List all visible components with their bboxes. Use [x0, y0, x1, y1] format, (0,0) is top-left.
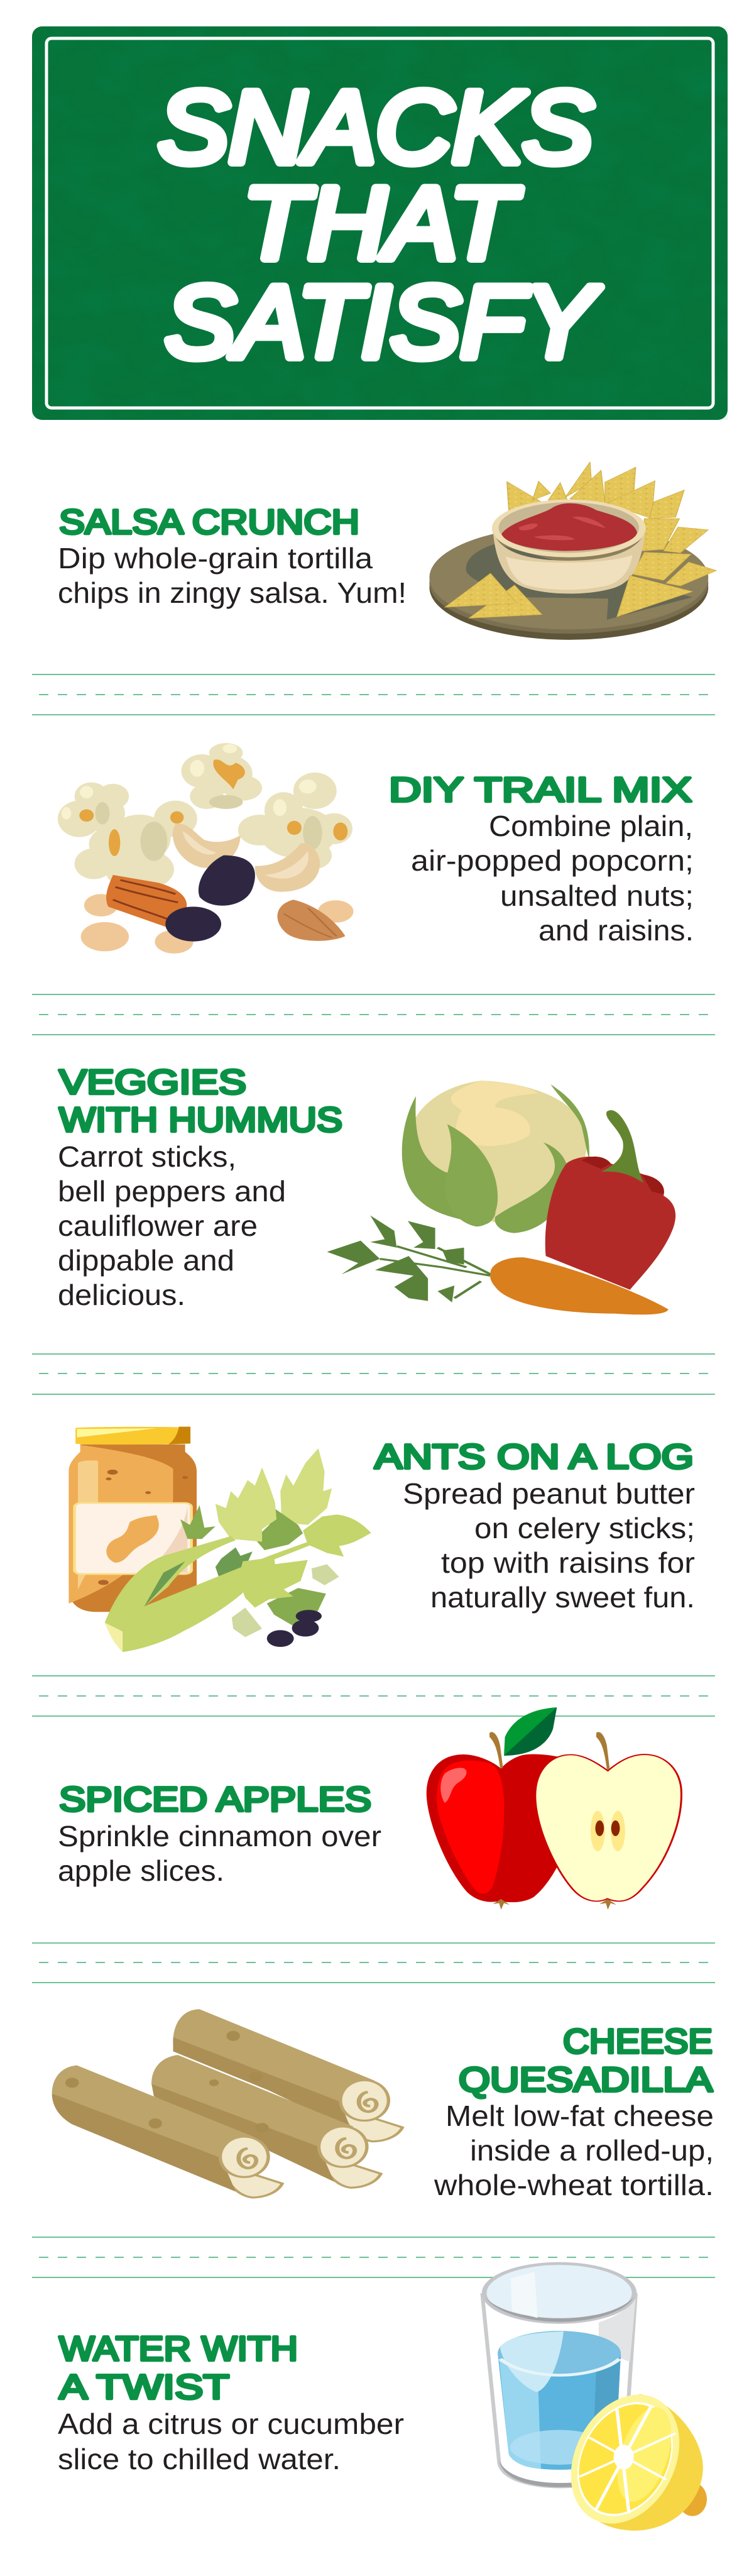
text: veggies description: delicious.	[58, 1279, 185, 1311]
text: spiced apples description	[58, 1820, 381, 1887]
text: ants on a log description	[403, 1477, 695, 1614]
text: ants on a log description: Spread peanut butter	[403, 1477, 695, 1510]
panel: spiced apples	[58, 1707, 681, 1910]
heading: veggies with hummus: VEGGIES	[59, 1062, 246, 1101]
text: salsa crunch description: chips in zingy salsa. Yum!	[58, 576, 407, 609]
text: veggies description: Carrot sticks,	[58, 1140, 236, 1173]
panel: salsa crunch	[58, 462, 716, 640]
text: trail mix description	[411, 810, 694, 947]
heading: cheese quesadilla: QUESADILLA	[459, 2060, 713, 2099]
text: water description	[58, 2408, 404, 2475]
icon: chips and salsa	[429, 462, 716, 640]
text: trail mix description: Combine plain,	[489, 810, 693, 842]
panel: veggies with hummus	[58, 1062, 675, 1314]
heading: cheese quesadilla	[459, 2022, 713, 2099]
panel: diy trail mix	[58, 743, 694, 954]
title	[158, 70, 601, 379]
panel: ants on a log	[68, 1427, 695, 1652]
heading: water with a twist	[59, 2329, 298, 2406]
text: salsa crunch description	[58, 542, 407, 609]
text: trail mix description: air-popped popcorn;	[411, 844, 694, 877]
heading: salsa crunch: SALSA CRUNCH	[59, 502, 359, 541]
text: quesadilla description	[434, 2100, 714, 2201]
heading: veggies with hummus	[59, 1062, 342, 1139]
title: SNACKS	[158, 70, 593, 184]
panel: cheese quesadilla	[52, 2009, 714, 2201]
icon: popcorn, nuts and raisins	[58, 743, 353, 954]
icon: rolled tortillas	[52, 2009, 403, 2198]
text: water description: Add a citrus or cucumber	[58, 2408, 404, 2440]
text: trail mix description: and raisins.	[538, 914, 694, 947]
heading: veggies with hummus: WITH HUMMUS	[59, 1100, 342, 1139]
heading: cheese quesadilla: CHEESE	[563, 2022, 713, 2061]
text: veggies description: cauliflower are	[58, 1209, 258, 1242]
icon: apples	[427, 1707, 681, 1910]
icon: cauliflower, bell pepper and carrot	[327, 1081, 675, 1314]
banner	[32, 26, 728, 420]
heading: diy trail mix: DIY TRAIL MIX	[389, 770, 692, 809]
text: spiced apples description: Sprinkle cinnamon over	[58, 1820, 381, 1852]
text: veggies description: bell peppers and	[58, 1175, 286, 1208]
text: ants on a log description: on celery sticks;	[474, 1512, 695, 1544]
text: veggies description	[58, 1140, 286, 1311]
text: quesadilla description: whole-wheat tortilla.	[434, 2169, 714, 2201]
banner inner border	[46, 38, 713, 408]
title: THAT	[243, 167, 522, 280]
text: ants on a log description: naturally sweet fun.	[430, 1581, 695, 1614]
heading: spiced apples: SPICED APPLES	[59, 1780, 371, 1819]
text: ants on a log description: top with raisins for	[441, 1546, 695, 1579]
title: SATISFY	[165, 265, 601, 379]
text: trail mix description: unsalted nuts;	[500, 879, 694, 912]
text: quesadilla description: Melt low-fat cheese	[445, 2100, 714, 2132]
heading: water with a twist: A TWIST	[59, 2367, 229, 2406]
panel: water with a twist	[58, 2264, 707, 2531]
text: quesadilla description: inside a rolled-up,	[470, 2134, 714, 2167]
text: spiced apples description: apple slices.	[58, 1854, 224, 1887]
icon: peanut butter jar and celery	[68, 1427, 371, 1652]
text: water description: slice to chilled water.	[58, 2443, 341, 2475]
icon: glass of water and lemon	[483, 2264, 707, 2531]
heading: water with a twist: WATER WITH	[59, 2329, 298, 2368]
text: salsa crunch description: Dip whole-grain tortilla	[58, 542, 373, 575]
heading: ants on a log: ANTS ON A LOG	[374, 1437, 694, 1476]
text: veggies description: dippable and	[58, 1244, 234, 1277]
